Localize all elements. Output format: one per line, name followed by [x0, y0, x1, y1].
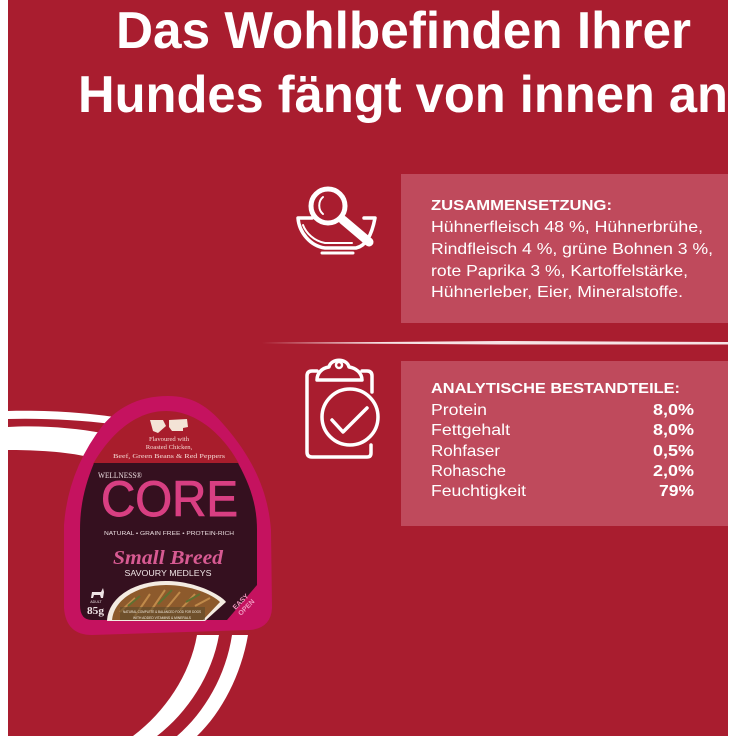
- adult icon and weight: 85g: [87, 606, 104, 617]
- ingredients text: rote Paprika 3 %, Kartoffelstärke,: [431, 263, 688, 280]
- divider line: [262, 341, 728, 344]
- nutrient labels: Protein: [431, 402, 487, 419]
- flavour text: Roasted Chicken,: [146, 444, 193, 451]
- panel: Zusammensetzung: [401, 174, 728, 323]
- nutrient values: 8,0%: [653, 402, 694, 419]
- ingredients text: Hühnerfleisch 48 %, Hühnerbrühe,: [431, 219, 703, 236]
- pack label red top: [93, 411, 239, 464]
- claims line: NATURAL • GRAIN FREE • PROTEIN-RICH: [104, 531, 234, 537]
- adult icon and weight: [87, 588, 104, 617]
- title: Hundes fängt von innen an: [78, 66, 728, 124]
- ingredients text: Hühnerleber, Eier, Mineralstoffe.: [431, 284, 683, 301]
- heading: Zusammensetzung: ZUSAMMENSETZUNG:: [431, 197, 612, 214]
- pack tray: [64, 396, 272, 635]
- nutrient labels: Rohasche: [431, 463, 506, 480]
- easy open tab: OPEN: [237, 598, 256, 617]
- nutrient labels: Feuchtigkeit: [431, 483, 527, 500]
- title: Das Wohlbefinden Ihrer: [116, 2, 691, 60]
- food photo: NATURAL COMPLETE & BALANCED FOOD FOR DOGS: [123, 610, 202, 614]
- variety: Savoury Medleys: SAVOURY MEDLEYS: [124, 569, 212, 578]
- panel: Analytische Bestandteile: [401, 361, 728, 526]
- icon: magnifier over bowl: [298, 189, 375, 253]
- nutrient labels: Rohfaser: [431, 443, 501, 460]
- decorative white swooshes: [8, 411, 248, 736]
- icons: chicken and beef: [150, 419, 188, 433]
- nutrient values: 2,0%: [653, 463, 694, 480]
- ingredients text: Rindfleisch 4 %, grüne Bohnen 3 %,: [431, 241, 713, 258]
- icon: clipboard with check mark: [307, 360, 378, 457]
- product: Wellness Core pack: [64, 396, 272, 635]
- adult icon and weight: ADULT: [90, 600, 103, 604]
- flavour text: [113, 436, 226, 460]
- variety: Small Breed: Small Breed: [113, 547, 224, 569]
- easy open tab: [232, 593, 256, 617]
- brand: Wellness: WELLNESS®: [98, 471, 142, 480]
- nutrient values: 0,5%: [653, 443, 694, 460]
- nutrient values: [653, 402, 694, 500]
- food photo: [107, 581, 226, 621]
- brand: CORE: CORE: [101, 471, 238, 527]
- flavour text: Beef, Green Beans & Red Peppers: [113, 453, 226, 460]
- pack label dark panel: [80, 463, 257, 620]
- ingredients text: [431, 219, 713, 301]
- nutrient labels: Fettgehalt: [431, 422, 511, 439]
- heading: Analytische Bestandteile: ANALYTISCHE BESTANDTEILE:: [431, 380, 680, 397]
- flavour text: Flavoured with: [149, 436, 190, 443]
- nutrient labels: [431, 402, 527, 500]
- easy open tab: EASY: [232, 593, 251, 611]
- title: [78, 2, 728, 124]
- nutrient values: 8,0%: [653, 422, 694, 439]
- food photo: WITH ADDED VITAMINS & MINERALS: [133, 616, 192, 620]
- nutrient values: 79%: [659, 483, 694, 500]
